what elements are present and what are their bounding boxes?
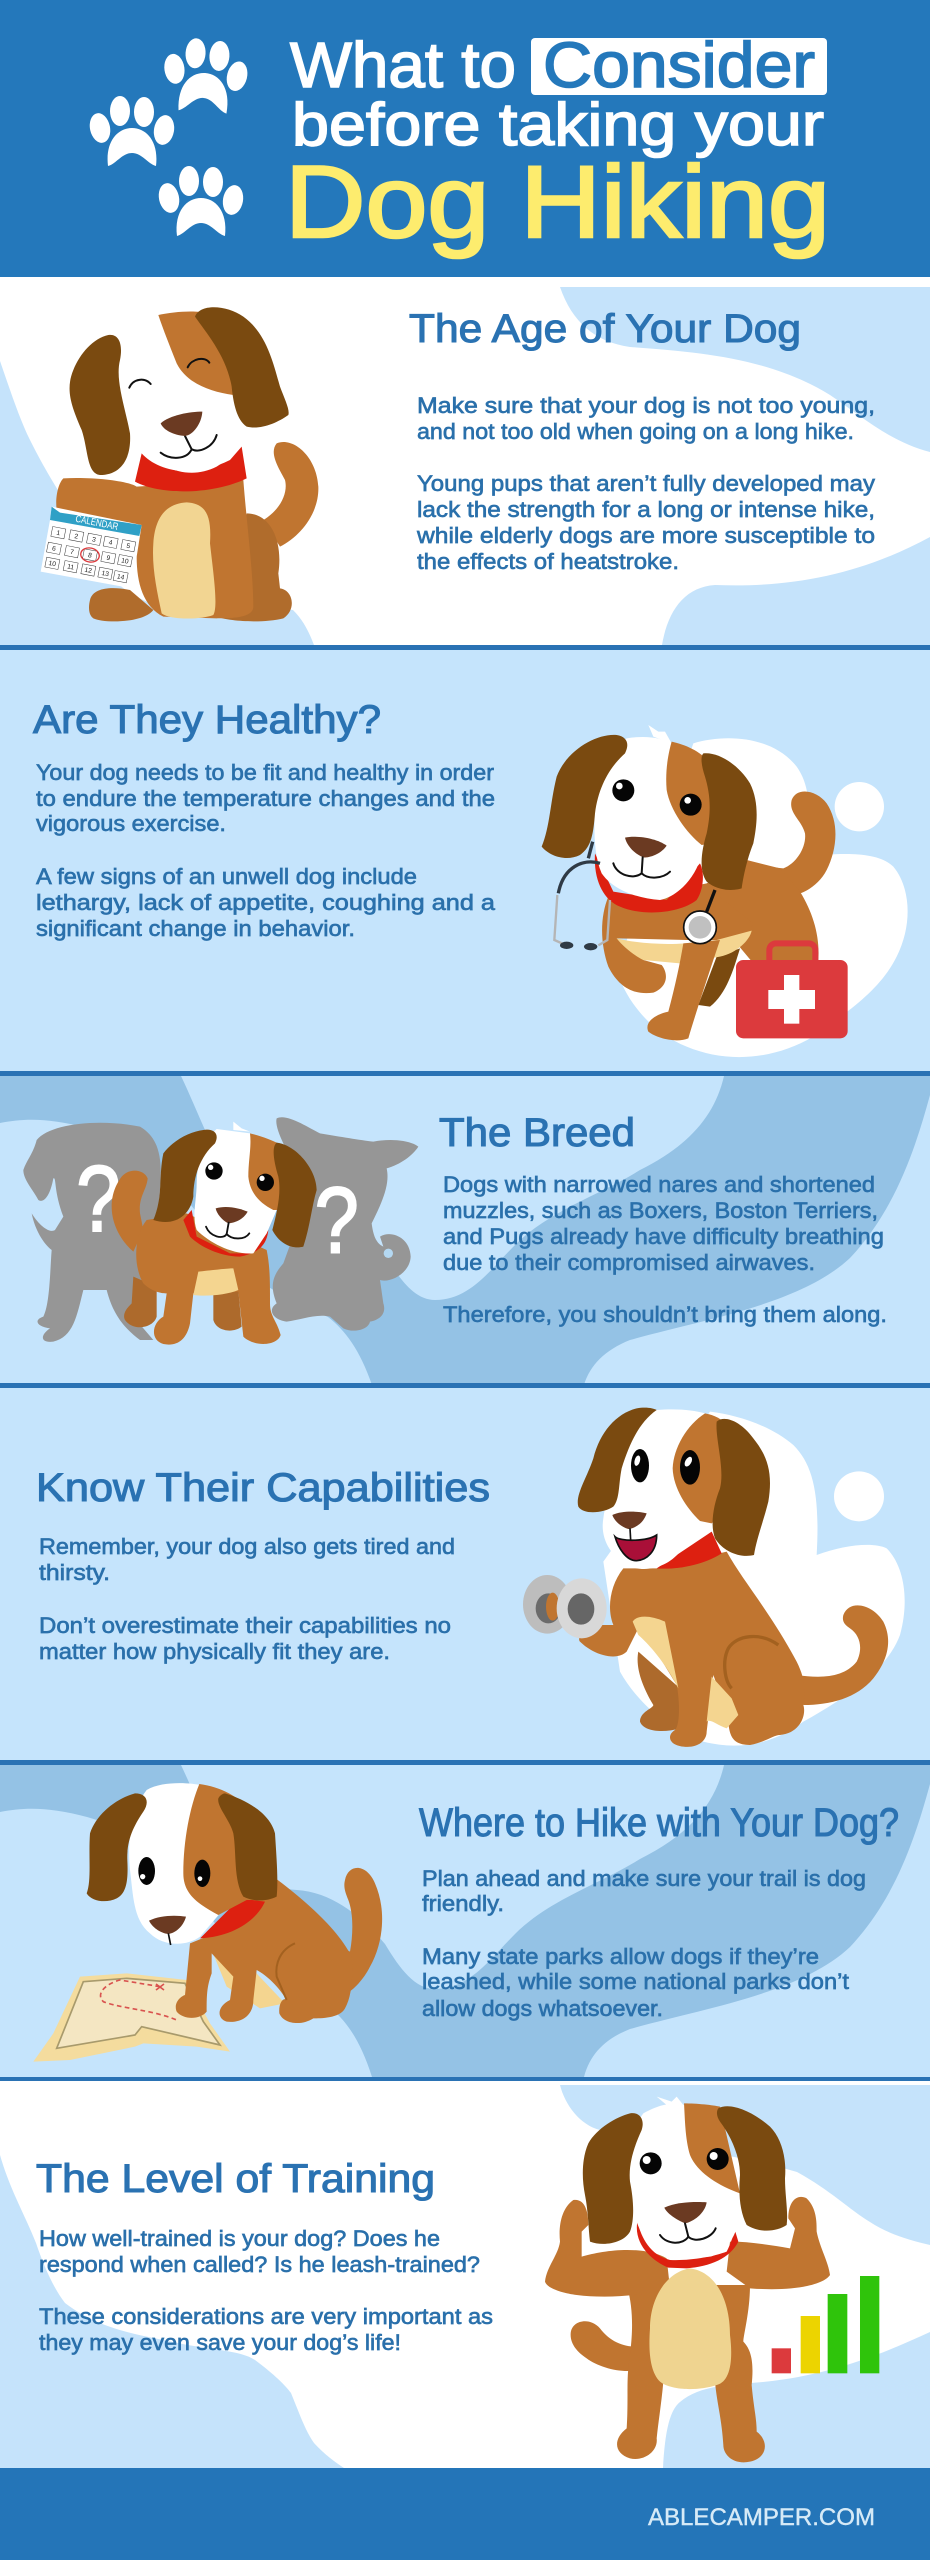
icon: dumbbell bbox=[523, 1575, 607, 1638]
panel: header bbox=[0, 0, 930, 277]
panel: the level of training bbox=[0, 2078, 930, 2468]
icon: grey mystery dog right: ? bbox=[315, 1169, 359, 1273]
text block: allow dogs whatsoever. bbox=[422, 1996, 663, 2021]
icon: calendar: 13 bbox=[101, 570, 110, 578]
icon: calendar: 10 bbox=[121, 557, 129, 566]
icon: calendar: 7 bbox=[69, 549, 75, 556]
icon: dog reading a map bbox=[33, 1783, 382, 2062]
text block: while elderly dogs are more susceptible to bbox=[416, 523, 875, 548]
icon: calendar: 11 bbox=[66, 563, 75, 572]
text block: Therefore, you shouldn’t bring them along. bbox=[443, 1302, 887, 1327]
panel: know their capabilities bbox=[0, 1385, 930, 1761]
text block bbox=[443, 1172, 887, 1327]
icon: dog with mystery breeds bbox=[23, 1117, 418, 1345]
text block: Plan ahead and make sure your trail is dog bbox=[422, 1866, 866, 1891]
heading: The Level of Training bbox=[36, 2157, 435, 2201]
icon: first aid kit bbox=[736, 943, 848, 1038]
text block: to endure the temperature changes and the bbox=[36, 786, 495, 811]
icon: calendar: CALENDAR bbox=[74, 514, 119, 533]
icon: trail map bbox=[33, 1973, 230, 2062]
text block bbox=[39, 1534, 455, 1664]
text block: and Pugs already have difficulty breathing bbox=[443, 1224, 884, 1249]
icon: dog lifting dumbbell bbox=[523, 1408, 905, 1747]
text block: they may even save your dog’s life! bbox=[39, 2330, 401, 2355]
text block: and not too old when going on a long hike. bbox=[417, 419, 854, 444]
panel: where to hike with your dog bbox=[0, 1761, 930, 2078]
text block bbox=[422, 1866, 866, 2021]
text block: thirsty. bbox=[39, 1560, 110, 1585]
text block: matter how physically fit they are. bbox=[39, 1639, 390, 1664]
panel: footer bbox=[0, 2468, 930, 2560]
text block: muzzles, such as Boxers, Boston Terriers, bbox=[443, 1198, 878, 1223]
icon: grey mystery dog left bbox=[23, 1123, 161, 1342]
text block: due to their compromised airwaves. bbox=[443, 1250, 815, 1275]
text block: lethargy, lack of appetite, coughing and a bbox=[36, 890, 496, 915]
text block: respond when called? Is he leash-trained? bbox=[39, 2252, 480, 2277]
footer source: ABLECAMPER.COM bbox=[648, 2504, 875, 2531]
text block: the effects of heatstroke. bbox=[417, 549, 679, 574]
title: Consider bbox=[543, 29, 815, 101]
icon: calendar: 9 bbox=[106, 555, 111, 562]
text block: leashed, while some national parks don’t bbox=[422, 1969, 849, 1994]
text block: Make sure that your dog is not too young, bbox=[417, 393, 875, 418]
title: before taking your bbox=[292, 91, 824, 158]
text block: Don’t overestimate their capabilities no bbox=[39, 1613, 451, 1638]
text block: significant change in behavior. bbox=[36, 916, 355, 941]
heading: Know Their Capabilities bbox=[36, 1466, 490, 1510]
panel: are they healthy bbox=[0, 647, 930, 1073]
heading: Are They Healthy? bbox=[33, 698, 381, 742]
text block: lack the strength for a long or intense hike, bbox=[417, 497, 875, 522]
text block: vigorous exercise. bbox=[36, 811, 226, 836]
heading: The Age of Your Dog bbox=[409, 307, 801, 351]
section dividers bbox=[0, 645, 930, 2081]
text block: Your dog needs to be fit and healthy in order bbox=[36, 760, 494, 785]
icon: calendar: 1 bbox=[56, 530, 61, 537]
text block bbox=[416, 393, 875, 574]
text block: Remember, your dog also gets tired and bbox=[39, 1534, 455, 1559]
title bbox=[285, 29, 830, 259]
icon: calendar: 5 bbox=[126, 543, 131, 550]
icon: calendar bbox=[41, 507, 142, 588]
icon: paw prints bbox=[87, 36, 252, 236]
panel: the age of your dog bbox=[0, 277, 930, 647]
icon: grey mystery dog right bbox=[272, 1117, 418, 1331]
icon: flexing dog with bar chart bbox=[545, 2097, 879, 2462]
icon: calendar: 3 bbox=[91, 536, 97, 544]
icon: calendar: 4 bbox=[108, 539, 113, 547]
icon: stethoscope bbox=[554, 842, 716, 950]
text block: Dogs with narrowed nares and shortened bbox=[443, 1172, 875, 1197]
panel: the breed bbox=[0, 1073, 930, 1385]
icon: calendar: 12 bbox=[84, 567, 93, 575]
icon: calendar: 8 bbox=[87, 552, 93, 560]
icon: happy dog with calendar bbox=[41, 307, 318, 621]
icon: calendar: 6 bbox=[51, 545, 57, 553]
bar chart bbox=[772, 2276, 879, 2373]
text block: How well-trained is your dog? Does he bbox=[39, 2226, 440, 2251]
text block bbox=[36, 760, 496, 941]
icon: grey mystery dog left: ? bbox=[76, 1148, 120, 1251]
heading: The Breed bbox=[439, 1111, 635, 1155]
icon: dog with stethoscope and first aid kit bbox=[542, 725, 908, 1057]
text block bbox=[39, 2226, 493, 2355]
text block: Many state parks allow dogs if they’re bbox=[422, 1944, 819, 1969]
icon: calendar: 10 bbox=[48, 560, 57, 568]
text block: A few signs of an unwell dog include bbox=[36, 864, 417, 889]
text block: These considerations are very important as bbox=[39, 2304, 493, 2329]
text block: Young pups that aren’t fully developed may bbox=[417, 471, 875, 496]
text block: friendly. bbox=[422, 1891, 504, 1916]
icon: calendar: 2 bbox=[74, 533, 79, 541]
title: What to bbox=[290, 29, 516, 101]
icon: calendar: 14 bbox=[116, 573, 125, 582]
title: Dog Hiking bbox=[285, 145, 830, 259]
